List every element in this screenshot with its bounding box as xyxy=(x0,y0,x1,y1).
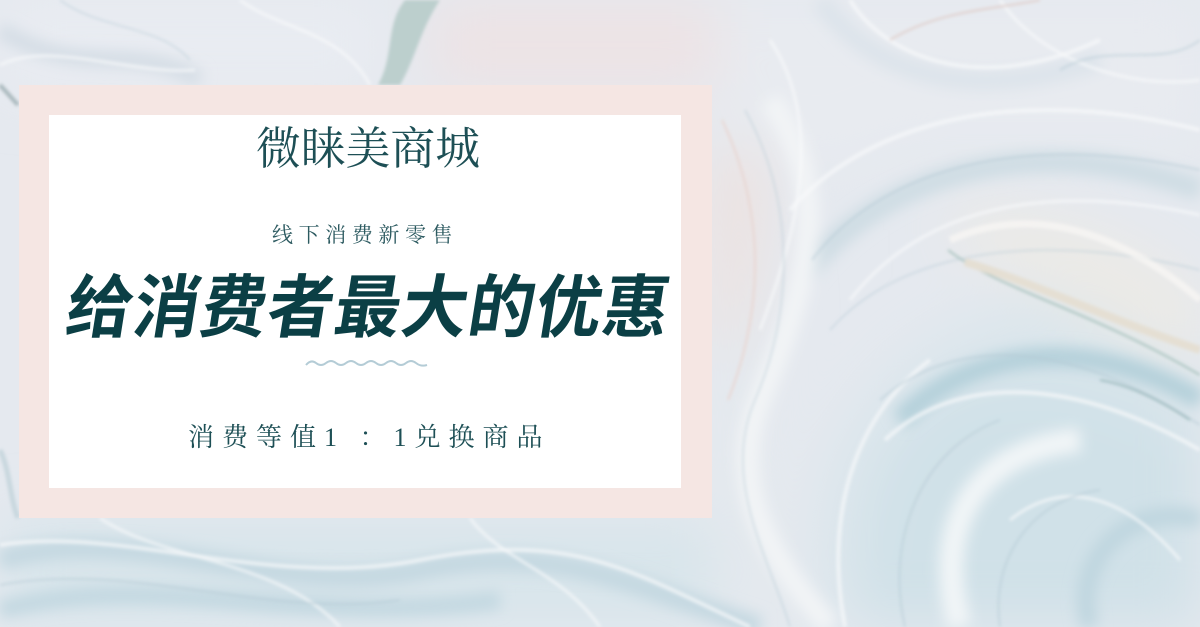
pink frame panel xyxy=(19,85,712,518)
bottom tagline: 消费等值1 ：1兑换商品 xyxy=(188,423,551,452)
brush headline: 给消费者最大的优惠 xyxy=(61,269,677,346)
subtitle: 线下消费新零售 xyxy=(272,223,458,247)
title: 微睐美商城 xyxy=(256,124,480,174)
white card xyxy=(49,115,681,488)
wavy divider xyxy=(305,360,428,367)
